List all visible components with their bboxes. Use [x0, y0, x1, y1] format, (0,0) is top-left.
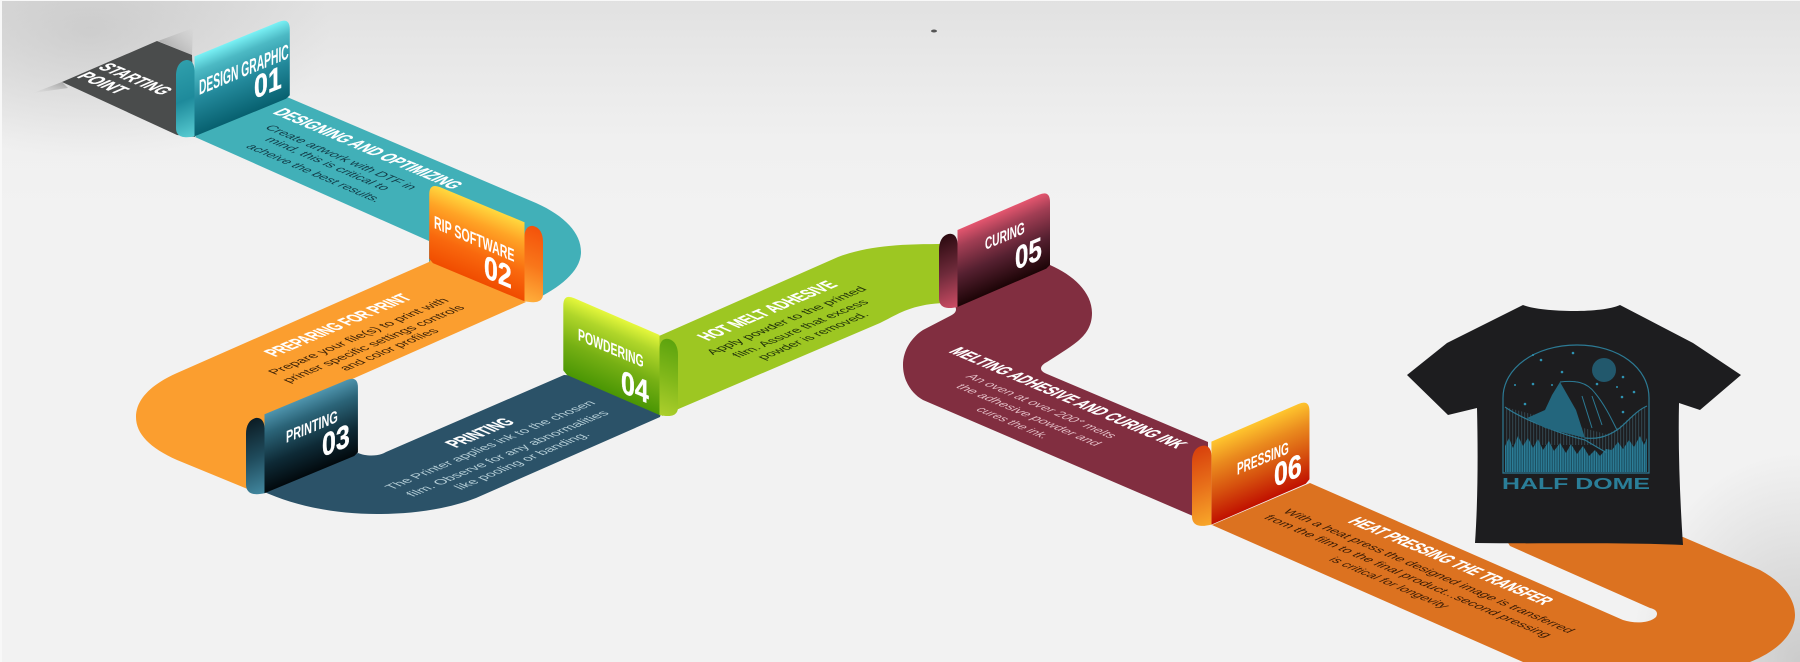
shadow: starting strip lower [33, 82, 68, 93]
ribbon: teal [195, 78, 581, 301]
panel: step 1 design graphic [176, 17, 581, 301]
panel: step 4 powdering [563, 244, 945, 423]
text block: step 6 description: from the film to the final product...second pressing [1260, 513, 1556, 639]
tab: pressing 06 [1192, 399, 1309, 533]
tab: rip software 02 [429, 182, 543, 309]
text block: step 4 description: Apply powder to the printed [702, 285, 870, 356]
tab: design graphic 01: 01 [254, 59, 282, 106]
heading: melting adhesive and curing ink: MELTING ADHESIVE AND CURING INK [944, 345, 1191, 451]
text block: step 4 description: powder is removed. [753, 311, 872, 361]
shadow: starting strip upper [158, 28, 193, 55]
ribbon: starting strip [62, 41, 195, 137]
text block: step 4 description: film. Assure that excess [728, 298, 873, 359]
ribbon: green [650, 244, 945, 416]
tab: curing 05: CURING [985, 218, 1025, 254]
text block: step 6 description: With a heat press the designed image is transferred [1279, 507, 1579, 634]
text block: step 5 description: An oven at over 200° melts [962, 372, 1121, 440]
heading: hot melt adhesive: HOT MELT ADHESIVE [693, 279, 843, 343]
tab: rip software 02: 02 [484, 248, 512, 296]
text block: step 2 description: printer specific settings controls [278, 303, 469, 384]
ribbon: orange [136, 258, 526, 490]
tab: powdering 04: POWDERING [578, 325, 644, 372]
panel: starting point [33, 28, 195, 137]
text block: step 1 description: acheive the best results. [242, 142, 386, 204]
tab: printing 03: PRINTING [286, 407, 338, 447]
heading: heat pressing the transfer: HEAT PRESSING THE TRANSFER [1343, 515, 1558, 607]
text: starting: STARTING [93, 61, 177, 97]
panel: step 3 printing [246, 375, 670, 514]
panel: step 5 curing [903, 190, 1208, 516]
ribbon: navy [262, 375, 670, 514]
print artwork [1503, 345, 1649, 473]
tab: design graphic 01: DESIGN GRAPHIC [199, 40, 289, 100]
text block: step 1 description: Create artwork with DTF in [261, 123, 421, 191]
tab: printing 03: 03 [322, 417, 350, 464]
tab: pressing 06: 06 [1274, 446, 1302, 494]
tab: curing 05 [939, 190, 1050, 315]
text: half dome: HALF DOME [1502, 476, 1650, 493]
panel: step 2 rip software [136, 182, 543, 490]
heading: printing: PRINTING [441, 416, 520, 450]
text block: step 3 description: The Printer applies ink to the chosen [381, 399, 599, 491]
ribbon: maroon [903, 262, 1208, 516]
text block: step 5 description: the adhesive powder and [952, 382, 1105, 447]
text block: step 3 description: film. Observe for any abnormalities [402, 409, 613, 498]
text block: step 2 description: Prepare your file(s) to print with [264, 296, 452, 376]
tab: rip software 02: RIP SOFTWARE [434, 212, 514, 266]
panel: step 6 pressing [1192, 399, 1795, 662]
mark: small speck [931, 30, 937, 32]
text block: step 5 description: cures the ink. [972, 405, 1054, 440]
ribbon: burnt orange [1212, 483, 1795, 662]
tab: pressing 06: PRESSING [1237, 438, 1289, 479]
text: point: POINT [72, 70, 133, 96]
tab: printing 03 [246, 375, 358, 501]
tab: powdering 04 [563, 293, 678, 423]
text block: step 2 description: and color profiles [335, 327, 443, 372]
text block: step 6 description: is critical for longevity [1325, 555, 1454, 610]
icon: t-shirt with half dome print [1407, 305, 1741, 545]
text block: step 1 description: mind, this is critical to [261, 135, 394, 192]
heading: designing and optimizing: DESIGNING AND OPTIMIZING [268, 106, 467, 191]
tab: design graphic 01 [176, 17, 290, 144]
tab: powdering 04: 04 [621, 363, 649, 411]
tab: curing 05: 05 [1015, 230, 1042, 277]
heading: preparing for print: PREPARING FOR PRINT [260, 292, 418, 359]
text block: step 3 description: like pooling or banding. [450, 430, 593, 491]
